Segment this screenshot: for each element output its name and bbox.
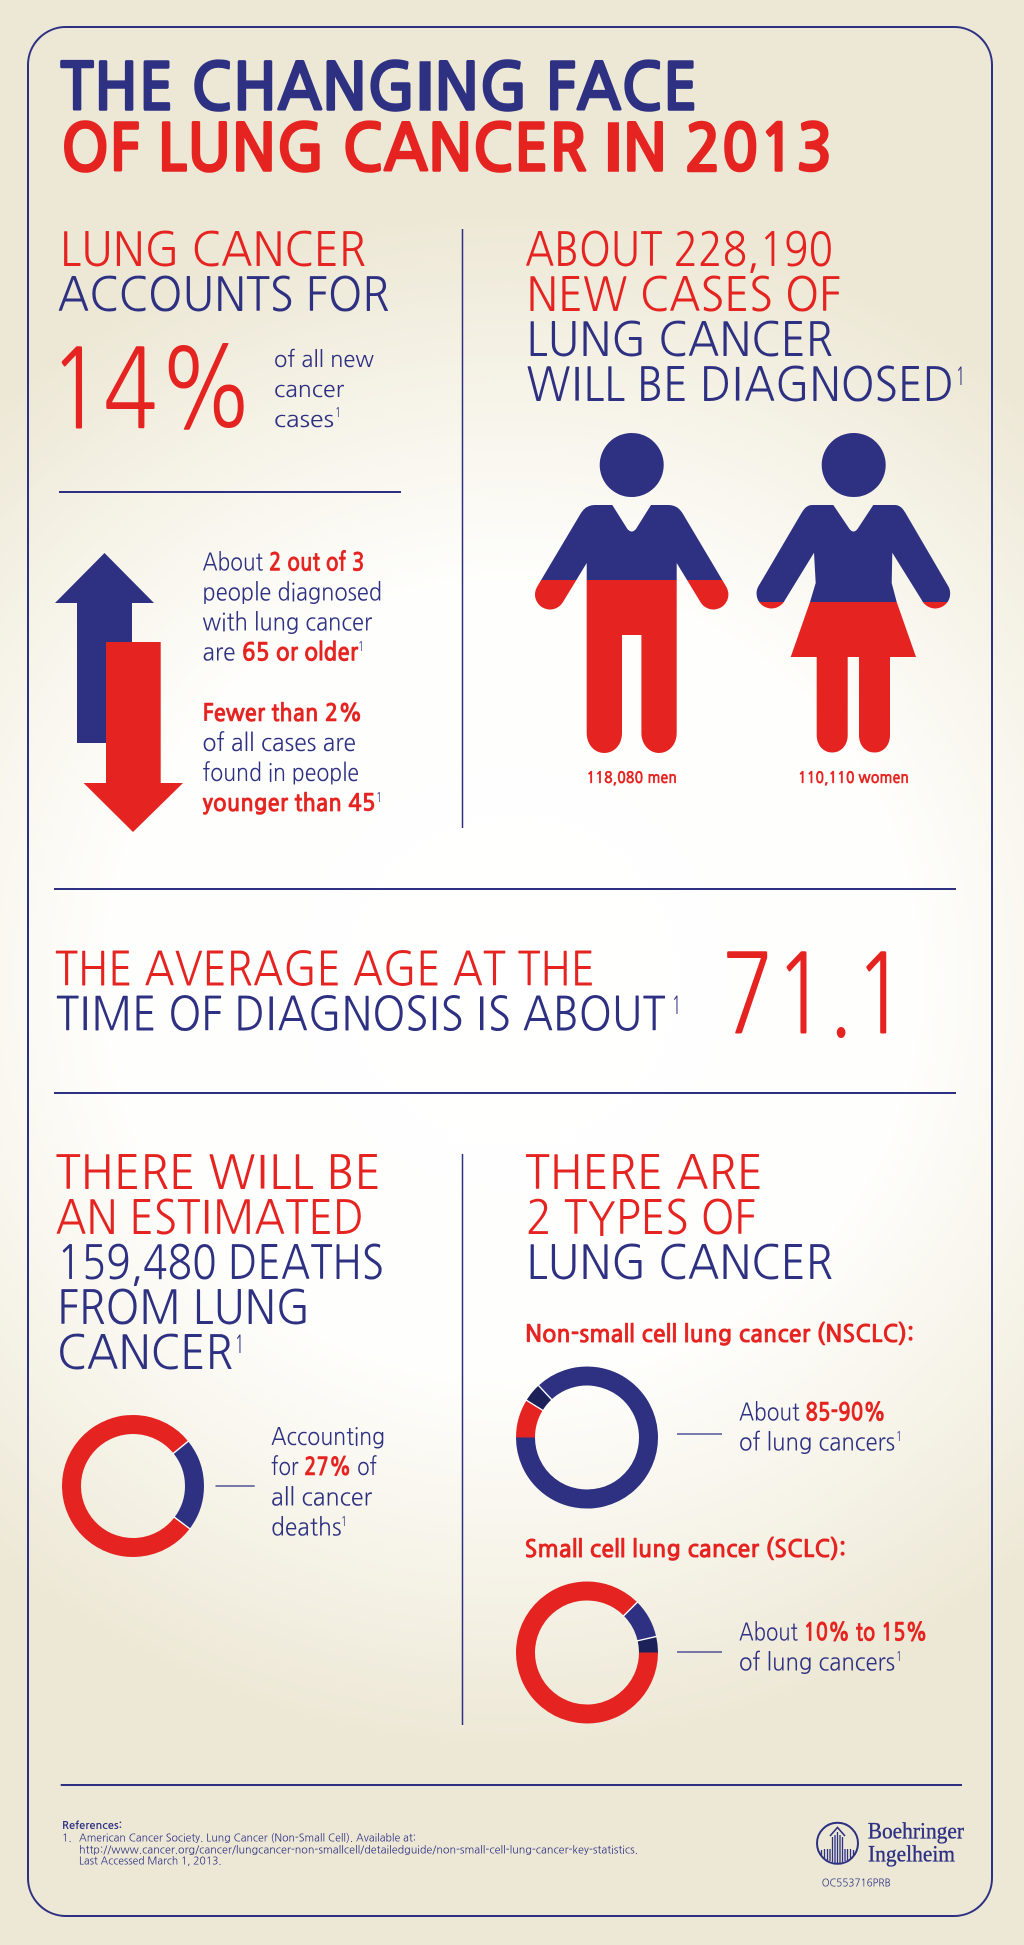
text: about 10% to 15%: About 10% to 15% xyxy=(739,1620,928,1645)
heading: about 228,190 new cases: ABOUT 228,190 xyxy=(525,226,833,273)
text: of all new cancer cases: cases xyxy=(274,409,334,431)
donut chart: SCLC xyxy=(525,1591,657,1714)
heading: average age at diagnosis: THE AVERAGE AGE AT THE xyxy=(55,946,595,993)
text: fewer than 2%: of all cases are xyxy=(202,730,356,755)
references: http://www.cancer.org/cancer/lungcancer-non-smallcell/detailedguide/non-small-cell-lung-cancer-key-statistics. xyxy=(79,1844,638,1855)
logo: Boehringer Ingelheim: Ingelheim xyxy=(868,1842,955,1867)
heading: 2 types: 2 TYPES OF xyxy=(526,1194,756,1241)
code: OC553716PRB: OC553716PRB xyxy=(822,1878,891,1889)
heading: average age at diagnosis: TIME OF DIAGNOSIS IS ABOUT xyxy=(56,986,666,1042)
text: fewer than 2%: younger than 45 xyxy=(202,791,376,815)
label: women: 110,110 women xyxy=(798,771,909,786)
heading: estimated deaths: THERE WILL BE xyxy=(56,1144,381,1200)
text: of all new cancer cases: of all new xyxy=(274,348,374,371)
references xyxy=(62,1820,638,1866)
heading: estimated deaths: FROM LUNG xyxy=(58,1284,310,1331)
logo: Boehringer Ingelheim: Boehringer xyxy=(868,1818,964,1843)
heading: lung cancer accounts for: LUNG CANCER xyxy=(60,226,366,273)
heading: 2 types: THERE ARE xyxy=(525,1149,763,1196)
heading: average age at diagnosis xyxy=(55,946,681,1042)
logo: Boehringer Ingelheim xyxy=(817,1818,964,1867)
text: about 10% to 15% xyxy=(739,1620,928,1675)
panel: new cases xyxy=(525,226,965,786)
text: accounting for 27%: 1 xyxy=(341,1515,347,1528)
panel: types of lung cancer xyxy=(524,1149,928,1714)
icon: woman xyxy=(757,433,950,752)
text: 2 out of 3: 1 xyxy=(358,640,364,653)
icon: up arrow xyxy=(55,553,154,743)
text: fewer than 2%: Fewer than 2% xyxy=(202,701,362,725)
heading: 2 types: LUNG CANCER xyxy=(526,1239,833,1286)
panel: share of new cases xyxy=(49,226,390,444)
heading: 2 types xyxy=(525,1149,833,1286)
heading: average age at diagnosis: 1 xyxy=(672,993,681,1018)
title: THE CHANGING FACE xyxy=(60,47,698,125)
icon: man xyxy=(535,433,728,753)
text: 2 out of 3: with lung cancer xyxy=(202,610,372,635)
references: American Cancer Society. Lung Cancer (Non-Small Cell). Available at: xyxy=(79,1832,416,1843)
text: of all new cancer cases xyxy=(274,348,374,431)
references: 1. xyxy=(62,1832,72,1843)
label: men: 118,080 men xyxy=(586,771,677,786)
text: fewer than 2%: 1 xyxy=(376,791,382,804)
heading: estimated deaths: AN ESTIMATED xyxy=(56,1189,364,1245)
subheading: NSCLC: Non-small cell lung cancer (NSCLC): xyxy=(525,1321,914,1346)
big number: 71.1: 71.1 xyxy=(721,939,907,1049)
heading: lung cancer accounts for xyxy=(58,226,390,318)
text: accounting for 27%: for 27% of xyxy=(271,1454,377,1479)
heading: estimated deaths xyxy=(56,1144,384,1376)
heading: estimated deaths: 159,480 DEATHS xyxy=(57,1239,384,1286)
text: about 10% to 15%: 1 xyxy=(896,1650,902,1663)
text: of all new cancer cases: 1 xyxy=(335,406,341,419)
text: about 85-90% xyxy=(739,1400,902,1455)
text: fewer than 2%: found in people xyxy=(202,760,359,785)
text: about 85-90%: About 85-90% xyxy=(739,1400,886,1425)
heading: lung cancer accounts for: ACCOUNTS FOR xyxy=(58,271,390,318)
text: accounting for 27%: deaths xyxy=(271,1514,342,1539)
panel: age distribution xyxy=(55,550,382,832)
heading: estimated deaths: CANCER xyxy=(57,1329,233,1376)
text: about 85-90%: of lung cancers xyxy=(739,1430,895,1455)
references: Last Accessed March 1, 2013. xyxy=(79,1855,222,1866)
title: OF LUNG CANCER IN 2013 xyxy=(61,108,833,186)
heading: estimated deaths: 1 xyxy=(235,1332,244,1357)
text: 2 out of 3 xyxy=(202,550,382,665)
heading: about 228,190 new cases xyxy=(525,226,965,412)
panel: deaths xyxy=(56,1144,385,1547)
donut chart: 27% of cancer deaths xyxy=(71,1424,194,1547)
text: fewer than 2% xyxy=(202,701,382,815)
donut chart: NSCLC xyxy=(526,1376,648,1499)
text: 2 out of 3: people diagnosed xyxy=(202,580,382,605)
heading: about 228,190 new cases: LUNG CANCER xyxy=(526,316,833,363)
heading: about 228,190 new cases: NEW CASES OF xyxy=(526,271,841,318)
heading: about 228,190 new cases: WILL BE DIAGNOSED xyxy=(526,356,954,412)
icon: down arrow xyxy=(84,642,183,832)
title xyxy=(60,47,833,186)
text: accounting for 27%: all cancer xyxy=(271,1485,372,1510)
text: about 85-90%: 1 xyxy=(896,1430,902,1443)
references: References: xyxy=(62,1820,122,1831)
text: 2 out of 3: are 65 or older xyxy=(202,640,358,665)
heading: about 228,190 new cases: 1 xyxy=(956,364,965,389)
text: of all new cancer cases: cancer xyxy=(274,379,345,401)
text: accounting for 27% xyxy=(271,1424,385,1539)
big number: 14%: 14% xyxy=(49,334,255,444)
text: about 10% to 15%: of lung cancers xyxy=(739,1650,895,1675)
panel: average age xyxy=(55,939,907,1049)
subheading: SCLC: Small cell lung cancer (SCLC): xyxy=(524,1536,846,1561)
text: 2 out of 3: About 2 out of 3 xyxy=(202,550,364,575)
text: accounting for 27%: Accounting xyxy=(271,1424,385,1449)
